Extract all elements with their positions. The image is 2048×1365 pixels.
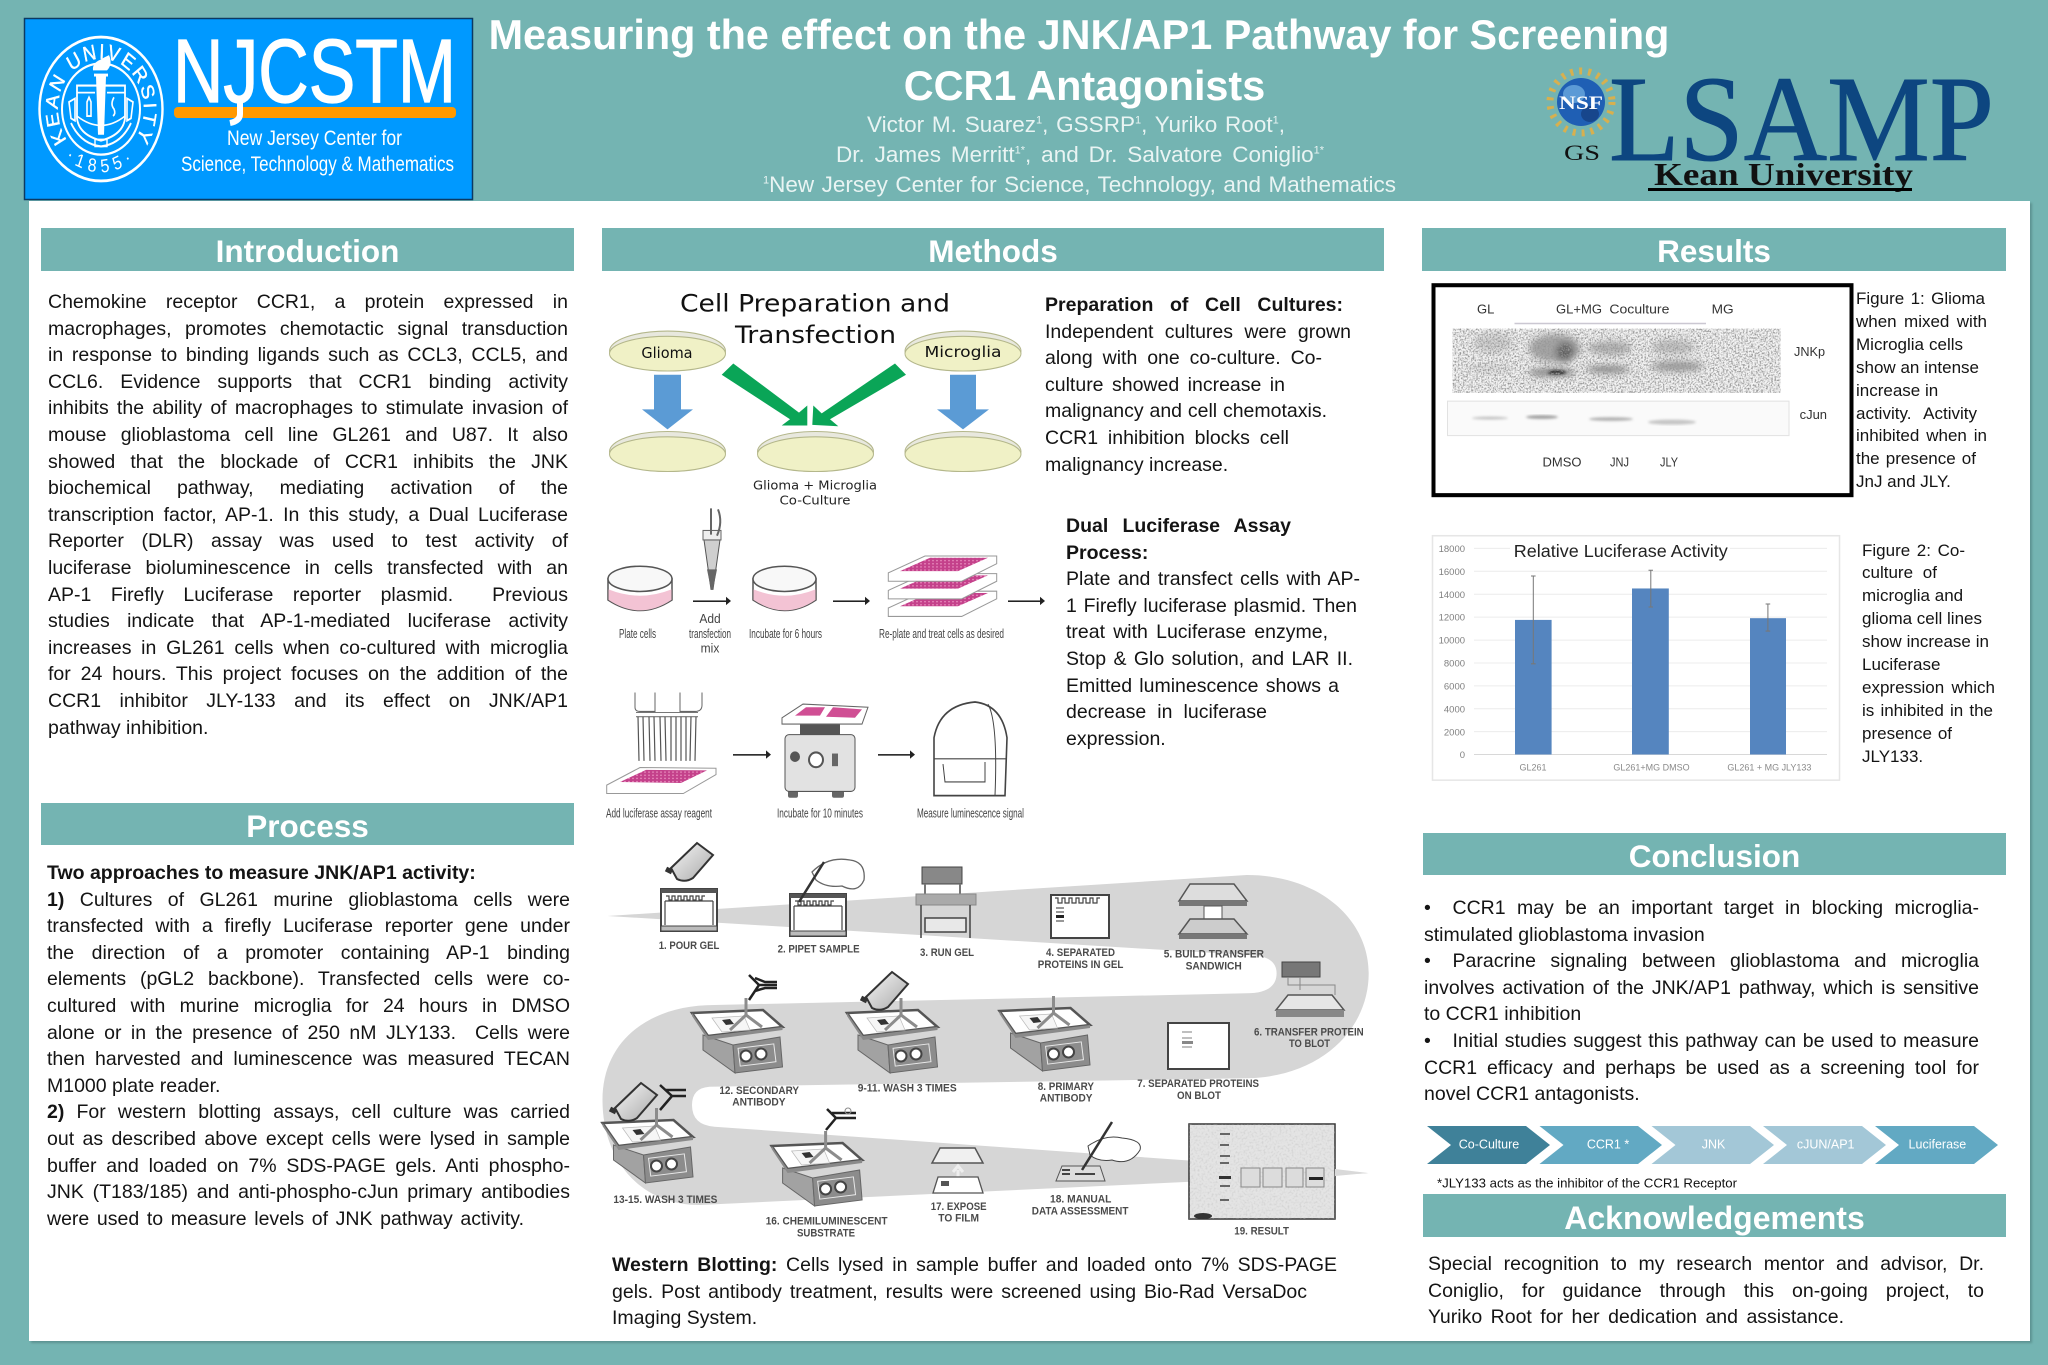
text: dual luciferase assay process: Dual Luciferase Assay bbox=[1066, 515, 1291, 537]
text: preparation of cell cultures: Preparation of Cell Cultures: bbox=[1045, 294, 1343, 316]
step 4: separated proteins bbox=[1051, 895, 1109, 938]
step 18: data assessment bbox=[1056, 1122, 1140, 1181]
text: introduction: pathway inhibition. bbox=[48, 716, 208, 738]
step 7: blot bbox=[1168, 1023, 1229, 1069]
text: preparation of cell cultures: malignancy and cell chemotaxis. bbox=[1045, 400, 1327, 422]
figure 2 caption: culture of bbox=[1862, 563, 1937, 582]
text: process: then harvested and luminescence was measured TECAN bbox=[47, 1048, 570, 1070]
chevron: Luciferase: Luciferase bbox=[1909, 1138, 1966, 1152]
text: process: transfected with a firefly Luciferase reporter gene under bbox=[47, 915, 570, 937]
step labels: 1. POUR GEL bbox=[659, 940, 720, 952]
step labels: 19. RESULT bbox=[1234, 1225, 1289, 1237]
arrow: microglia to co-culture bbox=[812, 363, 906, 426]
text: process bbox=[47, 862, 570, 1230]
text: preparation of cell cultures: Independent cultures were grown bbox=[1045, 321, 1351, 343]
text: process: JNK (T183/185) and anti-phospho-cJun primary antibodies bbox=[47, 1181, 570, 1203]
step 6: transfer protein bbox=[1276, 962, 1344, 1017]
text: introduction: increases in GL261 cells when co-cultured with microglia bbox=[48, 637, 568, 659]
arrow: glioma to co-culture bbox=[722, 363, 807, 426]
labels: workflow row 2: Add luciferase assay reagent bbox=[606, 806, 712, 821]
text: western blotting bbox=[612, 1254, 1337, 1329]
x axis labels bbox=[1520, 762, 1811, 773]
authors line 2: Dr. James Merritt1*, and Dr. Salvatore Coniglio1* bbox=[836, 142, 1324, 167]
labels: workflow row 1: Add bbox=[699, 612, 721, 626]
blot side and treatment labels: cJun bbox=[1800, 407, 1827, 422]
labels: workflow row 1: Incubate for 6 hours bbox=[749, 627, 822, 641]
y axis labels: 4000 bbox=[1444, 704, 1465, 715]
text: process: out as described above except cells were lysed in sample bbox=[47, 1128, 570, 1150]
step 5: transfer sandwich bbox=[1179, 884, 1247, 939]
step labels: 7. SEPARATED PROTEINS bbox=[1137, 1078, 1259, 1090]
icon: NSF globe with stars bbox=[1550, 71, 1612, 133]
blot column labels: MG bbox=[1712, 302, 1734, 317]
text: introduction: macrophages, promotes chemotactic signal transduction bbox=[48, 318, 568, 340]
step labels: SUBSTRATE bbox=[797, 1228, 855, 1240]
co-culture label: Co-Culture bbox=[780, 493, 850, 508]
y axis labels: 14000 bbox=[1439, 590, 1465, 601]
dish: co-culture bbox=[758, 432, 874, 472]
icon: Kean University seal: KEAN UNIVERSITY bbox=[46, 44, 157, 146]
blot side and treatment labels: JLY bbox=[1660, 455, 1678, 470]
text: acknowledgements: Special recognition to my research mentor and advisor, Dr. bbox=[1428, 1253, 1984, 1275]
heading: Process bbox=[41, 803, 574, 845]
logo: LSAMP: LSAMP bbox=[1609, 52, 1994, 187]
step labels: ANTIBODY bbox=[1040, 1093, 1093, 1105]
text: process: cultured with murine microglia for 24 hours in DMSO bbox=[47, 995, 570, 1017]
step labels: 8. PRIMARY bbox=[1038, 1081, 1095, 1093]
icon: Kean University seal bbox=[38, 36, 164, 182]
text: introduction bbox=[48, 291, 568, 738]
text: introduction: showed that the blockade of CCR1 inhibits the JNK bbox=[48, 451, 568, 473]
text: dual luciferase assay process bbox=[1066, 515, 1360, 750]
text: western blotting: Imaging System. bbox=[612, 1307, 757, 1329]
text: introduction: Reporter (DLR) assay was used to test activity of bbox=[48, 530, 568, 552]
y axis labels: 12000 bbox=[1439, 613, 1465, 624]
step labels: SANDWICH bbox=[1186, 960, 1242, 972]
pathway chevrons bbox=[1427, 1126, 1998, 1164]
error bars bbox=[1531, 570, 1770, 664]
icon: plate cells dish bbox=[608, 566, 672, 610]
chevron: Co-Culture bbox=[1427, 1126, 1550, 1164]
dish: microglia: Microglia bbox=[924, 342, 1001, 361]
blot column labels bbox=[1477, 302, 1734, 317]
poster title bbox=[489, 12, 1669, 109]
step 9-11: wash bbox=[847, 972, 938, 1073]
figure 2 caption: JLY133. bbox=[1862, 747, 1923, 766]
labels: workflow row 1: Plate cells bbox=[619, 627, 656, 641]
y axis labels bbox=[1439, 544, 1465, 761]
icon: plate shaker bbox=[782, 704, 868, 798]
step labels: ANTIBODY bbox=[732, 1097, 786, 1109]
text: dual luciferase assay process: Process: bbox=[1066, 542, 1148, 564]
figure 1 caption: the presence of bbox=[1856, 449, 1976, 468]
x axis labels: GL261 + MG JLY133 bbox=[1727, 762, 1811, 773]
text: preparation of cell cultures: along with one co-culture. Co- bbox=[1045, 347, 1322, 369]
figure 1 caption: increase in bbox=[1856, 381, 1938, 400]
logo: NJCSTM bbox=[24, 18, 474, 200]
step labels: 9-11. WASH 3 TIMES bbox=[858, 1083, 957, 1095]
text: process: M1000 plate reader. bbox=[47, 1075, 220, 1097]
text: acknowledgements: Coniglio, for guidance through this on-going project, to bbox=[1428, 1280, 1984, 1302]
chevron: Co-Culture: Co-Culture bbox=[1459, 1138, 1519, 1152]
dish: glioma bbox=[610, 331, 726, 371]
logo: LSAMP: GS bbox=[1564, 140, 1600, 165]
step 19: result blot bbox=[1189, 1124, 1368, 1219]
diagram title: Cell Preparation and bbox=[680, 291, 950, 318]
logo: NJCSTM: Science, Technology & Mathematics bbox=[181, 153, 454, 176]
figure 1 caption: when mixed with bbox=[1856, 312, 1987, 331]
heading: Methods bbox=[602, 228, 1384, 271]
figure 2 caption: microglia and bbox=[1862, 586, 1963, 605]
text: acknowledgements: Yuriko Root for her dedication and assistance. bbox=[1428, 1306, 1844, 1328]
logo: LSAMP: Kean University bbox=[1654, 156, 1913, 192]
blot column labels: Coculture bbox=[1609, 302, 1669, 317]
step labels bbox=[613, 940, 1364, 1240]
figure 1 caption: show an intense bbox=[1856, 358, 1979, 377]
heading: Conclusion: Conclusion bbox=[1629, 838, 1800, 874]
logo: NJCSTM: New Jersey Center for bbox=[227, 127, 402, 150]
authors line 1: Victor M. Suarez1, GSSRP1, Yuriko Root1, bbox=[867, 112, 1285, 137]
text: process: alone or in the presence of 250 nM JLY133. Cells were bbox=[47, 1022, 570, 1044]
step 13-15: wash bbox=[602, 1083, 693, 1183]
chevron: CCR1: CCR1 * bbox=[1587, 1138, 1629, 1152]
text: introduction: in response to binding ligands such as CCL3, CCL5, and bbox=[48, 344, 568, 366]
text: preparation of cell cultures: malignancy increase. bbox=[1045, 454, 1228, 476]
text: introduction: for 24 hours. This project focuses on the addition of the bbox=[48, 663, 568, 685]
figure 2: luciferase bar chart bbox=[1432, 536, 1840, 780]
figure 2 caption: Luciferase bbox=[1862, 655, 1940, 674]
figure 1 caption: JnJ and JLY. bbox=[1856, 472, 1951, 491]
step labels: 4. SEPARATED bbox=[1046, 947, 1115, 959]
text: introduction: CCR1 inhibitor JLY-133 and its effect on JNK/AP1 bbox=[48, 690, 568, 712]
step 12: secondary antibody bbox=[692, 975, 782, 1073]
text: conclusion: novel CCR1 antagonists. bbox=[1424, 1083, 1640, 1105]
step 16: chemiluminescent substrate bbox=[772, 1108, 862, 1206]
labels: workflow row 1: transfection bbox=[689, 627, 731, 641]
text: introduction: AP-1 Firefly Luciferase reporter plasmid. Previous bbox=[48, 584, 568, 606]
ribbon bbox=[602, 875, 1369, 1205]
figure 1 caption: Figure 1: Glioma bbox=[1856, 289, 1985, 308]
heading: Acknowledgements: Acknowledgements bbox=[1564, 1200, 1865, 1236]
chevron: JNK bbox=[1652, 1126, 1774, 1164]
text: introduction: transcription factor, AP-1. In this study, a Dual Luciferase bbox=[48, 504, 568, 526]
step labels: PROTEINS IN GEL bbox=[1038, 959, 1124, 971]
figure 2 caption: glioma cell lines bbox=[1862, 609, 1982, 628]
blot side and treatment labels: JNJ bbox=[1610, 455, 1629, 470]
chevron footnote: *JLY133 acts as the inhibitor of the CCR1 Receptor bbox=[1437, 1176, 1738, 1190]
text: western blotting: Western Blotting: Cells lysed in sample buffer and loaded onto 7% SDS-PAGE bbox=[612, 1254, 1337, 1276]
text: conclusion: • bbox=[1424, 1030, 1431, 1052]
step labels: 5. BUILD TRANSFER bbox=[1164, 949, 1264, 961]
heading: Introduction: Introduction bbox=[216, 233, 399, 269]
co-culture label: Glioma + Microglia bbox=[753, 478, 877, 492]
text: preparation of cell cultures: CCR1 inhibition blocks cell bbox=[1045, 427, 1289, 449]
chevron: cJUN/AP1: cJUN/AP1 bbox=[1797, 1138, 1855, 1152]
step 17: expose to film bbox=[932, 1148, 983, 1193]
text: introduction: mouse glioblastoma cell line GL261 and U87. It also bbox=[48, 424, 568, 446]
text: conclusion: CCR1 efficacy and perhaps be used as a screening tool for bbox=[1424, 1057, 1979, 1079]
heading: Introduction bbox=[41, 228, 574, 271]
dish: glioma: Glioma bbox=[641, 344, 693, 362]
icon: luminometer bbox=[934, 702, 1007, 796]
text: dual luciferase assay process: treat with Luciferase enzyme, bbox=[1066, 621, 1328, 643]
heading: Methods: Methods bbox=[928, 233, 1058, 269]
icon: incubate dish bbox=[753, 566, 816, 610]
figure 1 caption bbox=[1856, 289, 1987, 491]
text: introduction: CCL6. Evidence supports that CCR1 binding activity bbox=[48, 371, 568, 393]
step 2: pipet sample bbox=[790, 859, 864, 936]
step labels: 16. CHEMILUMINESCENT bbox=[766, 1216, 888, 1228]
chevron: Luciferase bbox=[1875, 1126, 1998, 1164]
text: conclusion: stimulated glioblastoma invasion bbox=[1424, 924, 1705, 946]
step labels: 6. TRANSFER PROTEIN bbox=[1254, 1027, 1364, 1039]
figure 1 caption: activity. Activity bbox=[1856, 404, 1977, 423]
y axis labels: 0 bbox=[1460, 750, 1465, 761]
co-culture label bbox=[753, 478, 877, 508]
text: dual luciferase assay process: Plate and transfect cells with AP- bbox=[1066, 568, 1360, 590]
logo wordmark: NJCSTM bbox=[173, 22, 456, 122]
step 1: pour gel bbox=[661, 843, 717, 931]
text: process: elements (pGL2 backbone). Transfected cells were co- bbox=[47, 968, 570, 990]
step labels: 17. EXPOSE bbox=[931, 1201, 987, 1213]
poster title: CCR1 Antagonists bbox=[904, 63, 1265, 109]
labels: workflow row 2: Incubate for 10 minutes bbox=[777, 806, 863, 821]
diagram title: Transfection bbox=[734, 323, 896, 349]
text: introduction: studies indicate that AP-1-mediated luciferase activity bbox=[48, 610, 568, 632]
y axis labels: 10000 bbox=[1439, 636, 1465, 647]
text: introduction: luciferase bioluminescence in cells transfected with an bbox=[48, 557, 568, 579]
text: conclusion: Initial studies suggest this pathway can be used to measure bbox=[1452, 1030, 1979, 1052]
arrows: workflow row 2 bbox=[733, 750, 915, 759]
bars bbox=[1515, 588, 1786, 754]
step labels: 2. PIPET SAMPLE bbox=[778, 944, 860, 956]
text: process: buffer and loaded on 7% SDS-PAGE gels. Anti phospho- bbox=[47, 1155, 570, 1177]
arrow: glioma down bbox=[642, 375, 693, 429]
text: conclusion: CCR1 may be an important target in blocking microglia- bbox=[1452, 897, 1979, 919]
y axis labels: 6000 bbox=[1444, 681, 1465, 692]
icon: add transfection mix tube bbox=[703, 508, 721, 589]
poster title: Measuring the effect on the JNK/AP1 Pathway for Screening bbox=[489, 12, 1669, 58]
y axis labels: 2000 bbox=[1444, 727, 1465, 738]
y axis labels: 8000 bbox=[1444, 659, 1465, 670]
figure 1 caption: Microglia cells bbox=[1856, 335, 1963, 354]
blot column labels: GL bbox=[1477, 302, 1494, 317]
text: process: 2) For western blotting assays, cell culture was carried bbox=[47, 1101, 570, 1123]
text: acknowledgements bbox=[1428, 1253, 1984, 1328]
figure 1: western blot image bbox=[1434, 285, 1852, 495]
text: western blotting: gels. Post antibody treatment, results were screened using Bio-Rad VersaDoc bbox=[612, 1281, 1307, 1303]
heading: Conclusion bbox=[1423, 833, 2006, 875]
text: introduction: biochemical pathway, mediating activation of the bbox=[48, 477, 568, 499]
heading: Results bbox=[1422, 228, 2006, 271]
heading: Results: Results bbox=[1657, 233, 1771, 269]
x axis labels: GL261+MG DMSO bbox=[1613, 762, 1690, 773]
figure 2 caption: show increase in bbox=[1862, 632, 1989, 651]
step labels: 12. SECONDARY bbox=[719, 1085, 800, 1097]
labels: workflow row 1: Re-plate and treat cells as desired bbox=[879, 627, 1004, 641]
y axis labels: 18000 bbox=[1439, 544, 1465, 555]
diagram: cell preparation and transfection bbox=[610, 291, 1021, 508]
labels: workflow row 2: Measure luminescence signal bbox=[917, 806, 1024, 821]
step labels: ON BLOT bbox=[1177, 1090, 1221, 1102]
arrows: workflow row 1 bbox=[693, 597, 1045, 605]
text: dual luciferase assay process: decrease in luciferase bbox=[1066, 701, 1267, 723]
step labels: TO FILM bbox=[938, 1213, 979, 1225]
text: process: the direction of a promoter containing AP-1 binding bbox=[47, 942, 570, 964]
text: conclusion: • bbox=[1424, 950, 1431, 972]
chevron: cJUN/AP1 bbox=[1763, 1126, 1886, 1164]
dish: glioma culture bbox=[610, 432, 726, 472]
figure 2 caption: Figure 2: Co- bbox=[1862, 540, 1965, 560]
text: conclusion bbox=[1424, 897, 1979, 1105]
text: preparation of cell cultures bbox=[1045, 294, 1351, 476]
text: process: Two approaches to measure JNK/AP1 activity: bbox=[47, 862, 476, 884]
figure 2 caption: presence of bbox=[1862, 724, 1952, 743]
JNKp blot bbox=[1452, 329, 1780, 393]
figure 2 caption bbox=[1862, 540, 1995, 766]
diagram: dual luciferase assay workflow bbox=[606, 508, 1045, 821]
text: preparation of cell cultures: culture showed increase in bbox=[1045, 374, 1285, 396]
affiliation: 1New Jersey Center for Science, Technology, and Mathematics bbox=[763, 172, 1396, 197]
icon: multichannel pipette and plate bbox=[607, 693, 716, 794]
chevron: JNK: JNK bbox=[1702, 1138, 1726, 1152]
step labels: 13-15. WASH 3 TIMES bbox=[613, 1194, 717, 1206]
text: introduction: inhibits the ability of macrophages to stimulate invasion of bbox=[48, 397, 568, 419]
labels: workflow row 1: mix bbox=[701, 641, 720, 656]
labels: workflow row 2 bbox=[606, 806, 1024, 821]
blot column labels: GL+MG bbox=[1556, 302, 1602, 317]
text: dual luciferase assay process: expression. bbox=[1066, 728, 1166, 750]
text: dual luciferase assay process: 1 Firefly luciferase plasmid. Then bbox=[1066, 595, 1357, 617]
arrow: microglia down bbox=[937, 375, 989, 429]
x axis labels: GL261 bbox=[1520, 762, 1546, 773]
dish: microglia culture bbox=[905, 432, 1021, 472]
diagram title bbox=[680, 291, 950, 349]
step labels: TO BLOT bbox=[1289, 1038, 1330, 1050]
chevron: CCR1 bbox=[1540, 1126, 1662, 1164]
step 8: primary antibody bbox=[1000, 996, 1090, 1071]
icon: NSF globe with stars: NSF bbox=[1559, 93, 1603, 114]
text: conclusion: Paracrine signaling between glioblastoma and microglia bbox=[1452, 950, 1979, 972]
dish: microglia bbox=[905, 331, 1021, 371]
labels: workflow row 1 bbox=[619, 612, 1004, 656]
step labels: 3. RUN GEL bbox=[920, 947, 974, 959]
diagram: western blot steps bbox=[602, 843, 1369, 1240]
text: dual luciferase assay process: Stop & Glo solution, and LAR II. bbox=[1066, 648, 1353, 670]
blot side and treatment labels: DMSO bbox=[1542, 455, 1581, 470]
text: introduction: Chemokine receptor CCR1, a protein expressed in bbox=[48, 291, 568, 313]
text: conclusion: to CCR1 inhibition bbox=[1424, 1003, 1581, 1025]
text: conclusion: • bbox=[1424, 897, 1431, 919]
y axis labels: 16000 bbox=[1439, 567, 1465, 578]
heading: Process: Process bbox=[246, 808, 369, 844]
text: process: 1) Cultures of GL261 murine glioblastoma cells were bbox=[47, 889, 570, 911]
text: process: were used to measure levels of JNK pathway activity. bbox=[47, 1208, 524, 1230]
step 3: run gel bbox=[916, 867, 976, 938]
figure 2 caption: is inhibited in the bbox=[1862, 701, 1993, 720]
step labels: DATA ASSESSMENT bbox=[1032, 1205, 1129, 1217]
blot side and treatment labels bbox=[1542, 344, 1827, 470]
heading: Acknowledgements bbox=[1423, 1194, 2006, 1237]
figure 1 caption: inhibited when in bbox=[1856, 426, 1987, 445]
text: dual luciferase assay process: Emitted luminescence shows a bbox=[1066, 675, 1339, 697]
figure 2 caption: expression which bbox=[1862, 678, 1995, 697]
blot side and treatment labels: JNKp bbox=[1794, 344, 1825, 359]
icon: Kean University seal: ·1855· bbox=[69, 154, 129, 172]
text: conclusion: involves activation of the JNK/AP1 pathway, which is sensitive bbox=[1424, 977, 1979, 999]
icon: stacked plates bbox=[888, 556, 997, 616]
step labels: 18. MANUAL bbox=[1050, 1193, 1112, 1205]
cJun blot bbox=[1448, 401, 1789, 436]
chart title: Relative Luciferase Activity bbox=[1514, 541, 1728, 561]
